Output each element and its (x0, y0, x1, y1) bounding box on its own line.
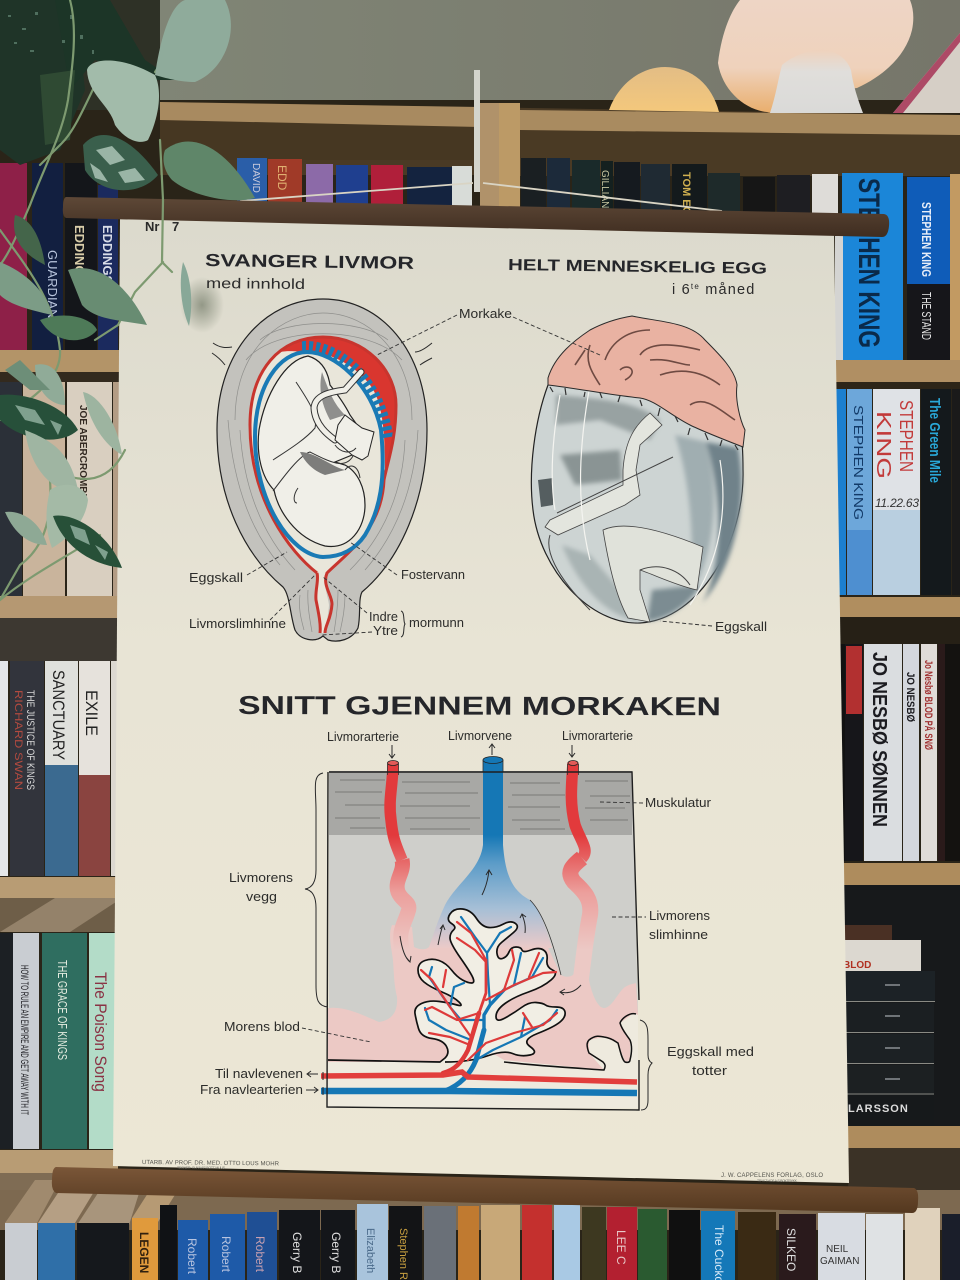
fetal arteries (421, 922, 557, 1073)
leaf: variegated centre (83, 135, 158, 190)
diagram: uterus cross-section (212, 299, 457, 641)
diagram labels: placenta section: Morens blod (224, 1020, 300, 1034)
diagram labels: uterus: Livmorslimhinne (189, 617, 286, 631)
diagram labels: placenta section: Eggskall med (667, 1045, 754, 1059)
diagram labels: uterus: Indre (369, 610, 398, 624)
muscle layer (329, 771, 632, 835)
footer credits: TEGNER: GUNNAR BOTT MUUS (177, 1166, 226, 1170)
diagram labels: uterus: Morkake (459, 307, 512, 321)
vessel openings (483, 756, 503, 764)
ligaments (212, 343, 432, 365)
books: top row behind the rod: GILLIAN (599, 170, 610, 208)
blue egg membrane (255, 352, 383, 557)
books: top row behind the rod: TOM EGEL (680, 172, 692, 230)
books: left column: THE JUSTICE OF KINGS (24, 690, 36, 790)
heading: helt menneskelig egg: i 6 (672, 282, 691, 298)
books: right column: JO NESBØ SØNNEN (868, 652, 890, 827)
heading: snitt gjennem morkaken: SNITT GJENNEM MORKAKEN (238, 690, 721, 721)
books: left column (0, 163, 122, 1149)
books: bottom row: Robert (253, 1236, 267, 1273)
footer credits: UTARB. AV PROF. DR. MED. OTTO LOUS MOHR (142, 1160, 280, 1167)
placenta (548, 316, 745, 447)
box outline (327, 772, 639, 1110)
diagram labels: placenta section (200, 729, 754, 1097)
footer credits (142, 1160, 823, 1183)
diagram labels: uterus: Fostervann (401, 568, 465, 582)
books: bottom row: Stephen R (397, 1228, 409, 1280)
vessel outlines (388, 760, 578, 975)
vines (0, 0, 74, 265)
uterus wall (217, 299, 427, 641)
vessel ends (322, 1072, 324, 1095)
heading: svanger livmor (205, 250, 415, 293)
direction arrows to labels (306, 744, 575, 1093)
books: top row behind the rod: EDD (275, 165, 289, 191)
poster number: 7 (172, 219, 179, 234)
right artery (570, 763, 590, 978)
diagram labels: placenta section: Livmorens (649, 909, 710, 923)
leaf: upper left group (68, 268, 147, 325)
label leader (513, 317, 712, 626)
heading: helt menneskelig egg (508, 257, 767, 298)
diagram labels: placenta section: Livmorarterie (562, 729, 633, 743)
placenta fringe (550, 387, 738, 450)
books: bottom row: LEGEN (137, 1232, 151, 1273)
diagram: complete human egg (513, 316, 745, 626)
dark patch (538, 478, 553, 507)
books: right column: 11.22.63 (875, 496, 919, 510)
books: left column: JOE ABERCROMBIE (77, 405, 88, 503)
books: bottom row: Robert (185, 1238, 199, 1275)
bottom wooden rod (52, 1167, 918, 1213)
books: top row behind the rod: DAVID (250, 163, 261, 193)
egg shell brace (640, 1020, 652, 1110)
hanging string and bracket (240, 70, 722, 211)
books: left column: HOW TO RULE AN EMPIRE AND GET AWAY WITH IT (18, 965, 30, 1115)
red uterine lining (250, 337, 396, 633)
footer credits: TRYKT HOS A.S BOKTRYKK (757, 1179, 798, 1183)
diagram labels: placenta section: Livmorarterie (327, 730, 399, 744)
outline of right villi (504, 1014, 636, 1070)
leaf: left middle (35, 364, 65, 405)
heading: helt menneskelig egg: HELT MENNESKELIG EGG (508, 257, 767, 278)
books: right column: STEPHEN KING (919, 202, 934, 277)
leaf: variegated bottom (53, 516, 122, 568)
books: left column: GUARDIANS (45, 250, 60, 328)
books: right column: STEPHEN KING (851, 405, 866, 520)
leaf: variegated lower (0, 395, 78, 440)
top wooden rod (63, 197, 889, 237)
label leaders (247, 315, 457, 635)
diagram labels: placenta section: Til navlevenen (215, 1067, 303, 1081)
books: right column: The Green Mile (926, 398, 943, 483)
fetal veins (425, 917, 557, 1091)
leaf: hanging small (181, 262, 191, 326)
umbilical vein (321, 1091, 637, 1093)
soft shading (556, 395, 741, 621)
diagram labels: uterus: mormunn (409, 616, 464, 630)
heading: helt menneskelig egg: måned (700, 282, 756, 298)
diagram labels: placenta section: Fra navlearterien (200, 1083, 303, 1097)
maternal vein (429, 760, 552, 948)
books: right column: STEPHEN KING (852, 178, 885, 348)
diagram labels: placenta section: vegg (246, 890, 277, 904)
uterine cavity (250, 337, 396, 633)
decorative object: leaning book (893, 33, 960, 113)
books: bottom row: LEE C (614, 1230, 628, 1265)
mucosa layer (329, 771, 638, 1090)
books: bottom row: Robert (219, 1236, 233, 1273)
books: right column (833, 173, 960, 1126)
fetus arm (545, 413, 662, 535)
fetus (258, 356, 374, 546)
books: left column: EXILE (82, 690, 101, 736)
label leaders (302, 802, 646, 1042)
books: bottom row: Elizabeth (364, 1228, 376, 1273)
books: bottom row: SILKEO (784, 1228, 798, 1271)
label: eggskall: Eggskall (715, 620, 767, 634)
books: bottom row: NEIL (826, 1244, 849, 1255)
left artery (390, 763, 409, 950)
wall brace (305, 773, 328, 1007)
books: bottom row (5, 1180, 960, 1280)
heading: svanger livmor: SVANGER LIVMOR (205, 250, 415, 273)
books: left column: The Poison Song (91, 972, 110, 1092)
diagram labels: uterus: Ytre (373, 624, 398, 638)
poster number: Nr (145, 219, 159, 234)
foot and hand (335, 415, 374, 460)
books: right column: KING (872, 411, 894, 479)
placenta folds (575, 330, 735, 420)
diagram labels: placenta section: slimhinne (649, 928, 708, 942)
diagram labels: placenta section: Livmorvene (448, 729, 512, 743)
chorionic villi (328, 909, 565, 1062)
leaf: sage right (163, 141, 255, 200)
speckled variegation (8, 12, 94, 54)
books: bottom row: Gerry B (329, 1232, 343, 1273)
diagram labels: placenta section: Livmorens (229, 871, 293, 885)
umbilical cord (314, 372, 361, 440)
flow arrows (400, 870, 581, 995)
egg (531, 370, 743, 623)
books: right column: Jo Nesbø BLOD PÅ SNØ (922, 660, 935, 750)
books: right column: JO NESBØ (904, 672, 916, 722)
leaf: large pale top (155, 0, 231, 82)
books: left column: SANCTUARY (49, 670, 68, 760)
books: left column: THE GRACE OF KINGS (55, 960, 70, 1060)
diagram labels: uterus: Eggskall (189, 571, 243, 585)
dark foliage (0, 0, 85, 165)
plant shadow on poster (180, 277, 224, 333)
books: left column: EDDINGS (100, 225, 115, 285)
decorative object: mushroom lamp (718, 0, 913, 113)
diagram labels: placenta section: Muskulatur (645, 796, 711, 810)
placental villi (302, 346, 389, 440)
muscle fibres (335, 780, 630, 829)
wall texture (228, 313, 418, 632)
fetus lines (549, 457, 690, 610)
plant: pothos vines and leaves (0, 0, 255, 600)
books: right column: LARSSON (848, 1103, 909, 1115)
decorative object: small lamp (609, 67, 719, 112)
chorion plate (327, 1013, 638, 1108)
fetus leg (603, 526, 703, 622)
books: right column: BLOD (843, 960, 871, 971)
books: bottom row: GAIMAN (820, 1256, 859, 1267)
leaf: pale lower cluster (83, 392, 122, 455)
books: right column: STEPHEN (896, 400, 916, 472)
ear (294, 488, 298, 503)
placenta crescent (280, 337, 396, 470)
poster paper (113, 219, 849, 1183)
books: bottom row: Gerry B (290, 1232, 304, 1273)
diagram labels: placenta section: totter (692, 1064, 727, 1078)
books: top row behind the rod (237, 158, 838, 230)
books: left column: RICHARD SWAN (12, 690, 24, 790)
books: left column: EDDINGS (72, 225, 87, 285)
umbilical artery (321, 1072, 637, 1082)
heading: helt menneskelig egg: te (691, 282, 700, 291)
maternal blood space (328, 900, 638, 1070)
books: right column: THE STAND (919, 292, 934, 340)
footer credits: J. W. CAPPELENS FORLAG, OSLO (721, 1173, 823, 1179)
diagram labels: uterus (189, 307, 512, 638)
leaf: pale centre (87, 60, 159, 142)
diagram: section through the placenta (302, 744, 652, 1110)
heading: svanger livmor: med innhold (206, 276, 305, 293)
